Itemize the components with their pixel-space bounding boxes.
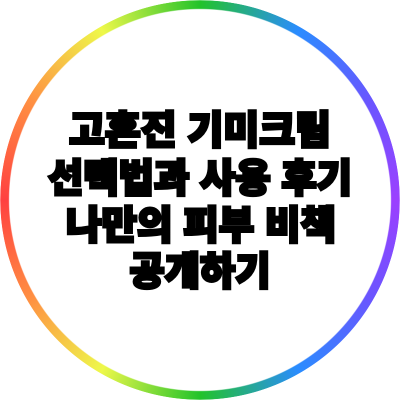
title line 1: 고혼진 기미크림 (69, 109, 331, 153)
title line 4: 공개하기 (129, 250, 271, 294)
title line 3: 나만의 피부 비책 (66, 204, 336, 248)
title line 2: 선택법과 사용 후기 (48, 157, 352, 201)
